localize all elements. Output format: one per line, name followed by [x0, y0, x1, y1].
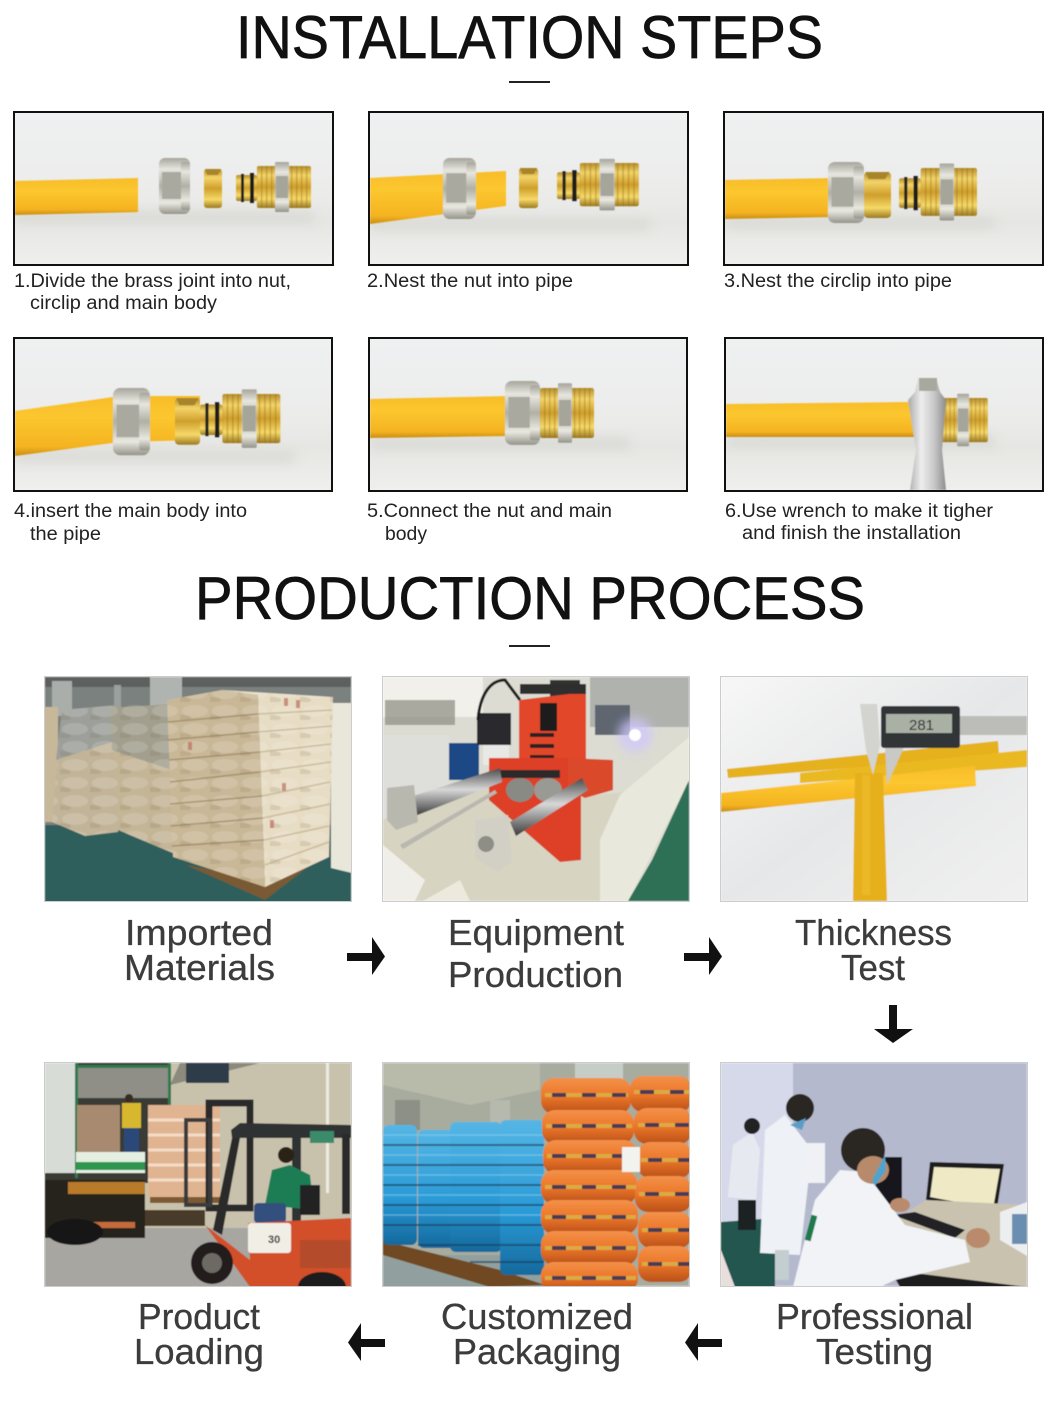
heading: installation steps: INSTALLATION STEPS [236, 4, 823, 71]
photo: step 6 [725, 338, 1043, 491]
caption: step 1: 1.Divide the brass joint into nut, [14, 271, 291, 292]
panel: installation steps [14, 4, 1043, 545]
caption: step 5 [367, 501, 612, 545]
caption: step 4: 4.insert the main body into [14, 501, 247, 522]
caption: imported materials [124, 912, 275, 988]
photo: thickness test [720, 676, 1028, 902]
caption: step 6: and finish the installation [742, 523, 961, 544]
caption: step 2: 2.Nest the nut into pipe [367, 271, 573, 292]
caption: step 4: the pipe [30, 524, 101, 545]
caption: imported materials: Materials [124, 947, 275, 988]
panel: production process [44, 565, 1028, 1372]
arrow: thickness test to testing [874, 1005, 913, 1043]
photo: step 5 [369, 338, 687, 491]
photo: thickness test: 281 [909, 717, 934, 734]
caption: product loading: Loading [134, 1331, 264, 1372]
caption: professional testing [776, 1296, 973, 1372]
photo: product loading: 30 [268, 1234, 280, 1246]
heading: production process: PRODUCTION PROCESS [195, 565, 865, 632]
caption: customized packaging [441, 1296, 633, 1372]
photo: step 3 [724, 112, 1043, 265]
caption: step 3: 3.Nest the circlip into pipe [724, 271, 952, 292]
caption: customized packaging: Customized [441, 1296, 633, 1337]
arrow: testing to packaging [685, 1323, 722, 1361]
photo: step 2 [369, 112, 688, 265]
caption: step 1 [14, 271, 291, 314]
caption: imported materials: Imported [125, 912, 273, 953]
photo: equipment production [382, 676, 690, 902]
caption: step 4 [14, 501, 247, 545]
photo: step 4 [14, 338, 332, 491]
photo: step 1 [14, 112, 333, 265]
arrow: packaging to loading [348, 1323, 385, 1361]
caption: step 5: body [385, 524, 428, 545]
caption: professional testing: Testing [816, 1331, 933, 1372]
photo: professional testing [720, 1062, 1028, 1287]
caption: equipment production: Production [448, 954, 623, 995]
caption: professional testing: Professional [776, 1296, 973, 1337]
caption: step 6 [725, 501, 994, 544]
caption: customized packaging: Packaging [453, 1331, 621, 1372]
caption: step 6: 6.Use wrench to make it tigher [725, 501, 994, 522]
caption: step 5: 5.Connect the nut and main [367, 501, 612, 522]
arrow: materials to equipment [347, 937, 385, 975]
photo: imported materials [44, 676, 352, 902]
caption: equipment production [448, 912, 624, 995]
caption: product loading [134, 1296, 264, 1372]
caption: thickness test: Thickness [795, 912, 952, 953]
photo: product loading [44, 1062, 352, 1302]
photo: customized packaging [382, 1062, 692, 1292]
caption: product loading: Product [138, 1296, 260, 1337]
arrow: equipment to thickness test [684, 937, 722, 975]
caption: step 1: circlip and main body [30, 293, 218, 314]
caption: equipment production: Equipment [448, 912, 624, 953]
caption: thickness test [795, 912, 952, 988]
caption: thickness test: Test [841, 947, 905, 988]
